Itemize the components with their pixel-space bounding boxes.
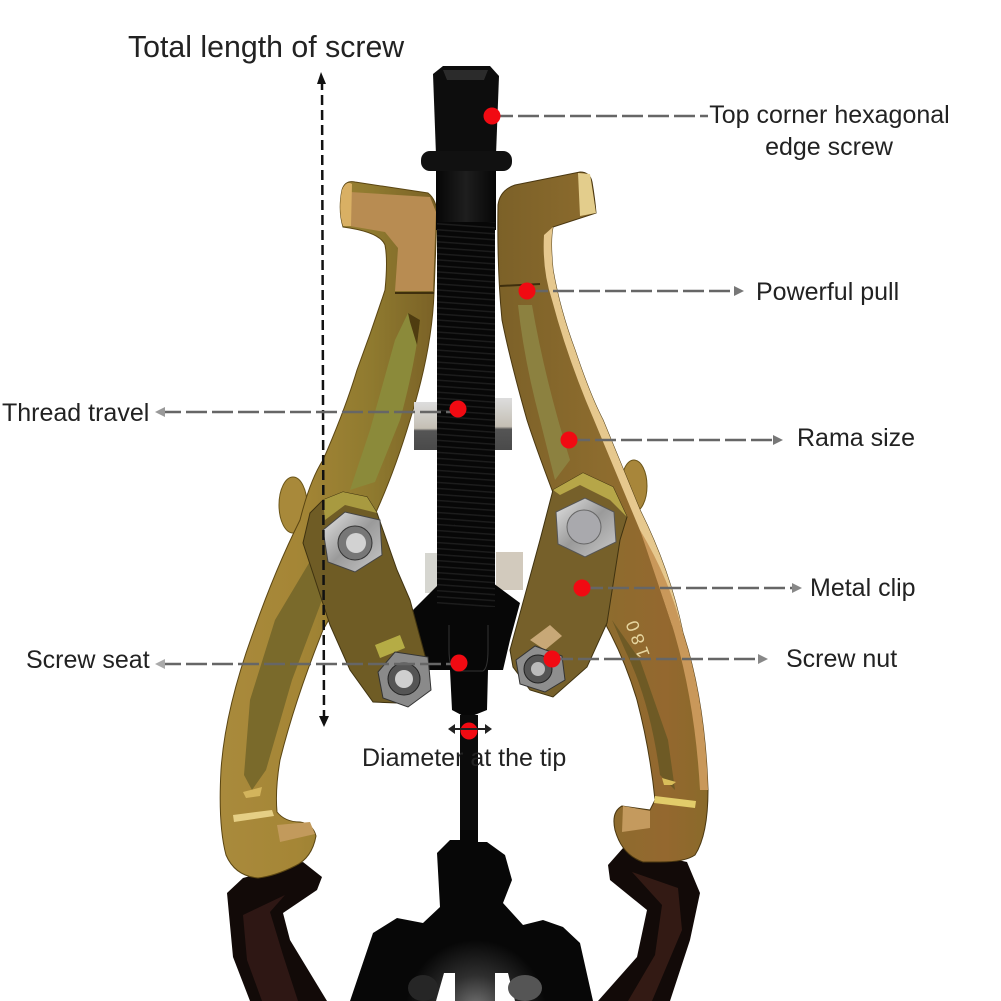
reflection of tool xyxy=(227,825,700,1001)
callout: thread travel: Thread travel xyxy=(2,399,149,427)
callout: screw nut xyxy=(544,645,897,673)
puller left arm xyxy=(220,182,437,878)
callout: metal clip xyxy=(574,574,916,602)
rear pivot bolts xyxy=(279,460,647,533)
callout: rama size: Rama size xyxy=(797,424,915,452)
left link plate xyxy=(303,492,427,703)
callout: powerful pull xyxy=(518,278,899,306)
callout: metal clip: Metal clip xyxy=(810,574,916,602)
callout: screw seat xyxy=(26,646,468,674)
bolts on plates xyxy=(323,498,616,707)
right link plate xyxy=(510,473,627,697)
callout: top corner hexagonal edge screw: edge screw xyxy=(765,133,894,161)
callout: top corner hexagonal edge screw: Top corner hexagonal xyxy=(709,101,950,129)
callout: powerful pull: Powerful pull xyxy=(756,278,899,306)
arm stamp: 180 xyxy=(621,614,654,660)
central screw seat xyxy=(413,583,520,718)
callout: diameter at the tip xyxy=(362,722,566,772)
rear nuts xyxy=(414,398,523,593)
callout: top corner hexagonal edge screw xyxy=(484,101,950,161)
callout: screw nut: Screw nut xyxy=(786,645,897,673)
callout: rama size xyxy=(560,424,915,452)
callout: diameter at the tip: Diameter at the tip xyxy=(362,744,566,772)
puller right arm xyxy=(498,172,708,862)
callout: screw seat: Screw seat xyxy=(26,646,150,674)
dimension arrow: total length of screw xyxy=(317,72,329,727)
title: Total length of screw xyxy=(128,31,404,64)
callout: thread travel xyxy=(2,399,466,427)
screw shaft with hexagonal head xyxy=(421,66,512,830)
